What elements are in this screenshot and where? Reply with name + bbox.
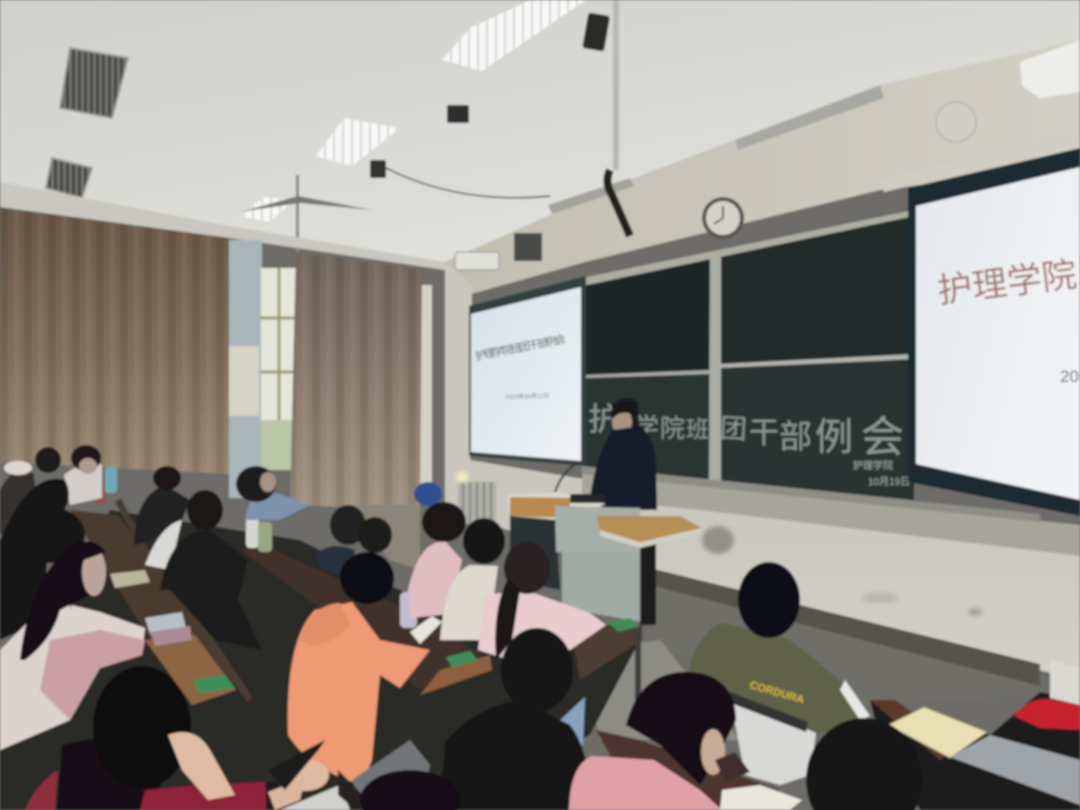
screen date large: 20 <box>1060 367 1079 386</box>
band below board <box>582 474 1080 556</box>
student: olive hoodie <box>688 623 868 735</box>
wall damp stains <box>702 526 982 615</box>
student hair: foreground right <box>806 718 922 810</box>
student hair foreground <box>93 666 191 788</box>
screen title large: 护理学院 <box>935 255 1079 311</box>
speaker at lectern <box>555 398 657 626</box>
floor aisle <box>640 570 1040 705</box>
pillar with poster <box>229 240 262 498</box>
student: orange hoodie <box>288 602 430 785</box>
speaker jacket <box>590 426 657 510</box>
student pair centre <box>330 505 366 545</box>
student: cream jacket <box>440 565 498 640</box>
back-row students <box>0 445 392 650</box>
foreground left student <box>25 666 460 810</box>
chalk headline: 院 <box>660 415 685 443</box>
lectern <box>508 492 702 625</box>
red strap <box>25 770 58 810</box>
student: blue jacket <box>245 490 310 520</box>
air vents <box>46 48 128 198</box>
screen title: 护理学院班团干部例会 <box>474 332 567 363</box>
chalk signature: 10月19日 <box>868 476 910 488</box>
blackboard <box>582 210 1040 522</box>
chalk headline: 例 <box>815 417 853 459</box>
wall left strip <box>445 262 472 490</box>
projector screen left <box>469 276 586 466</box>
chalk headline: 干 <box>749 417 779 450</box>
front right desk <box>870 692 1080 810</box>
curtain left <box>0 182 445 474</box>
skirting <box>650 568 1040 686</box>
ceiling lights <box>241 0 884 222</box>
student: dark jacket with mask <box>145 520 182 570</box>
chalk headline: 班 <box>686 416 709 442</box>
ceiling <box>0 0 1080 262</box>
student hair: olive hoodie <box>738 562 800 638</box>
jacket brand text: CORDURA <box>748 679 806 706</box>
upper wall <box>445 40 1080 300</box>
centre students <box>288 502 606 810</box>
chalk headline: 护 <box>588 401 620 437</box>
dark floor under desks <box>0 510 640 810</box>
water bottles <box>246 518 259 548</box>
student: white cap <box>0 470 38 535</box>
student: black back figure <box>555 697 585 745</box>
student: pink jacket reader <box>569 756 722 810</box>
curtain centre <box>290 252 422 510</box>
chalk headline <box>588 401 904 462</box>
chalk headline: 团 <box>719 413 748 445</box>
foreground right students <box>569 562 1080 810</box>
speaker head <box>612 398 639 436</box>
radiator and blue chair <box>414 471 496 524</box>
window <box>261 268 432 485</box>
projector screen right <box>880 132 1080 516</box>
red bag <box>1014 699 1080 730</box>
left column students <box>0 479 145 750</box>
screen date: 2023年10月12日 <box>505 391 550 401</box>
student jacket <box>57 735 170 810</box>
student: pink shirt ponytail <box>478 590 606 660</box>
wall clock <box>702 197 744 239</box>
chalk signature: 护理学院 <box>853 459 893 472</box>
green desk labels <box>193 675 235 693</box>
student: pink hoodie left <box>408 542 462 618</box>
chalk headline: 部 <box>779 418 812 455</box>
student hand raised <box>168 732 235 800</box>
student: black jacket <box>134 485 190 545</box>
chalk headline: 学 <box>634 414 659 442</box>
chalk headline: 会 <box>861 414 904 462</box>
desk rows <box>70 467 1080 810</box>
lower wall <box>445 262 1080 680</box>
yellow notebook <box>888 707 987 758</box>
stationery <box>145 612 186 634</box>
chalk signature <box>853 459 910 488</box>
student: pink-white jacket <box>0 600 145 750</box>
dark hair group <box>0 479 69 640</box>
student: white jacket <box>64 463 102 505</box>
student hair: orange hoodie <box>340 552 394 604</box>
student hair: pink jacket <box>626 672 736 785</box>
ceiling fan, cameras and microphone <box>240 0 1080 320</box>
